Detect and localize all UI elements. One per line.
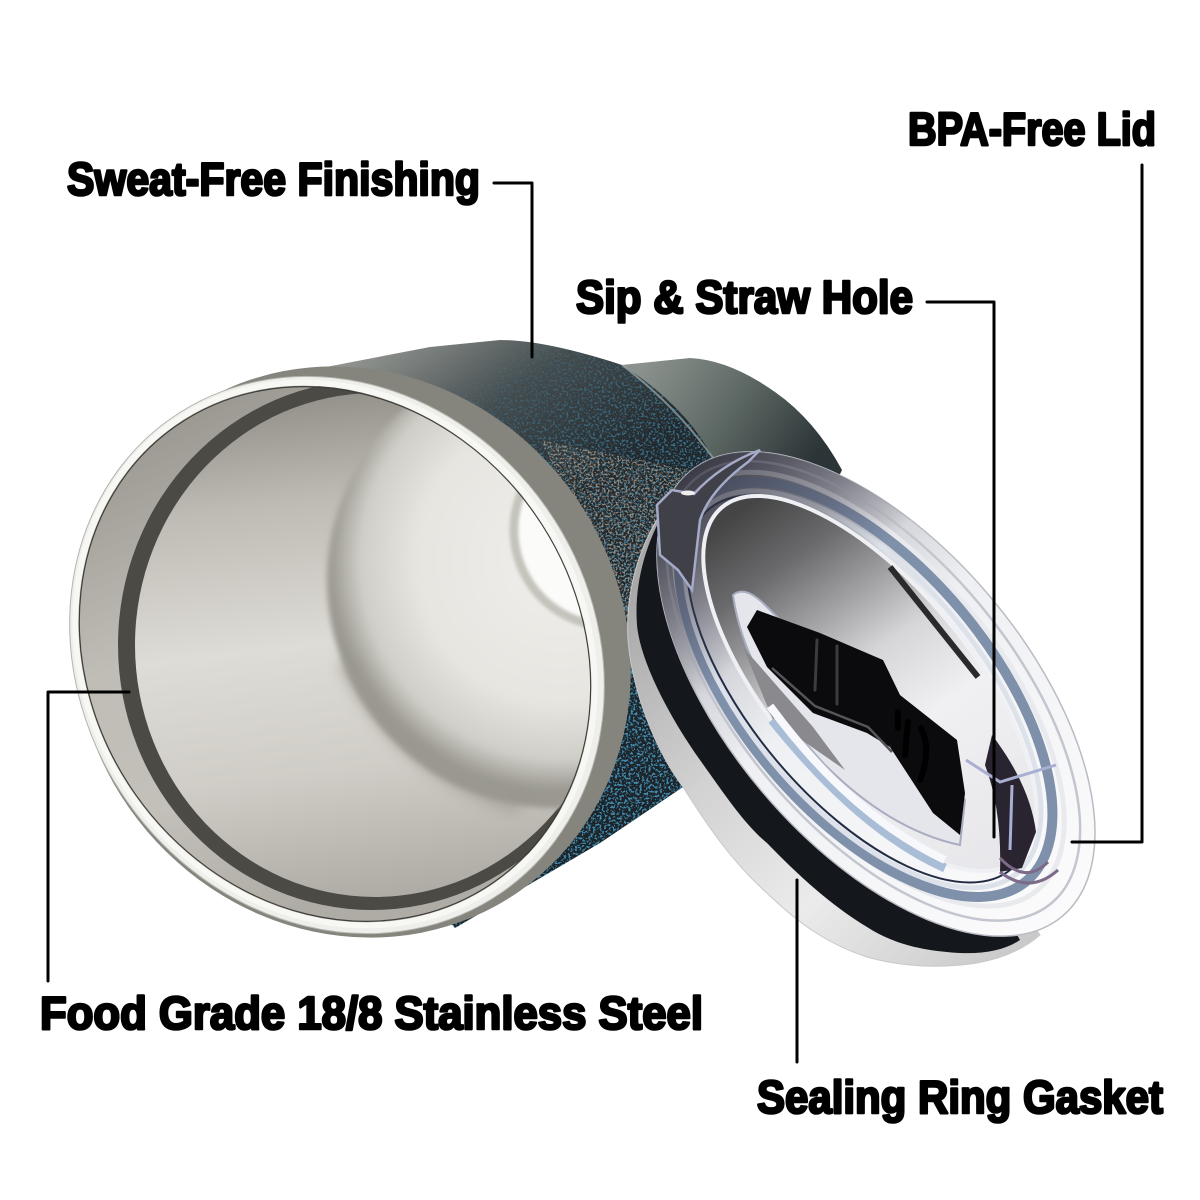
inner dish	[705, 498, 1034, 869]
clear lid shell	[656, 451, 1096, 937]
darkened upper lid over the cup	[657, 452, 904, 690]
callout: Sip & Straw Hole	[576, 271, 994, 837]
black sip slider	[747, 610, 965, 835]
slider dots	[898, 712, 926, 780]
curved shoulder reflection	[324, 407, 592, 812]
silver rim edge lines	[0, 271, 712, 1039]
bright hole reflection	[508, 490, 586, 628]
lid notch	[657, 450, 760, 590]
lid	[627, 449, 1096, 967]
tumbler cup	[69, 340, 842, 938]
floor of cup	[135, 393, 561, 897]
straw hole cross mark	[966, 760, 1056, 850]
callout: BPA-Free Lid: BPA-Free Lid	[908, 103, 1156, 155]
black sealing ring	[637, 510, 1020, 953]
purple streaks at lid base	[1000, 858, 1058, 883]
callout: BPA-Free Lid	[908, 103, 1156, 842]
slider ridges	[815, 640, 837, 704]
callout: Sip & Straw Hole: Sip & Straw Hole	[576, 271, 913, 323]
dark reflection at lid edge	[985, 735, 1036, 872]
callout: Sealing Ring Gasket: Sealing Ring Gasket	[757, 1071, 1163, 1123]
dark sliver inside lid	[890, 567, 978, 677]
outer silver rim band	[0, 257, 742, 1047]
white inner rim ring	[0, 281, 700, 1027]
steel interior	[78, 386, 591, 922]
inner wall	[78, 386, 528, 922]
rim rings	[666, 460, 1082, 922]
sweat-free glitter body	[300, 340, 730, 928]
callout: Food Grade 18/8 Stainless Steel	[40, 692, 703, 1039]
dark reflection below shoulder	[345, 660, 520, 806]
callout: Sweat-Free Finishing: Sweat-Free Finishing	[67, 153, 480, 205]
callout: Sweat-Free Finishing	[67, 153, 532, 357]
slider recess highlight	[733, 592, 965, 845]
dark floor seam	[118, 386, 564, 910]
grey shadow in recess	[743, 647, 845, 770]
callout: Food Grade 18/8 Stainless Steel: Food Grade 18/8 Stainless Steel	[40, 987, 703, 1039]
white streak and blue reflection in recess	[772, 720, 945, 868]
silver gasket seat	[628, 500, 1040, 966]
cup base section	[622, 358, 842, 640]
